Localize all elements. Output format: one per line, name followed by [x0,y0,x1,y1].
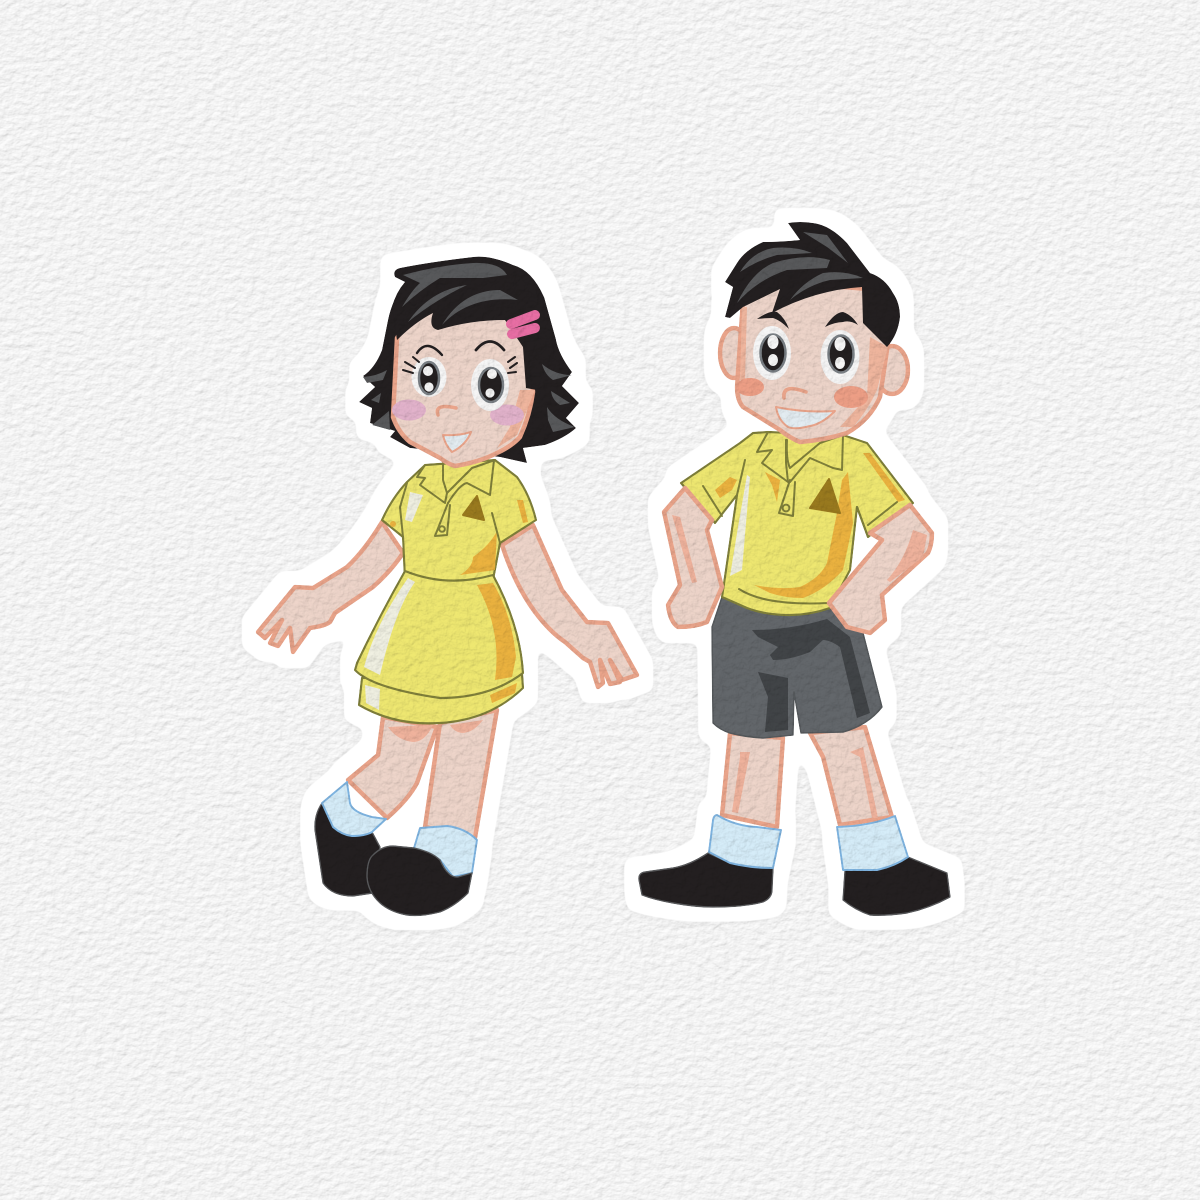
boy: arm shading [672,515,927,583]
girl: hair highlights [363,263,575,432]
boy: left leg [722,733,783,827]
girl: lower skirt [359,673,523,723]
boy: shirt [681,432,913,615]
boy: right shoe [843,857,950,915]
girl: nose [437,407,456,415]
boy: left shoe [639,853,773,907]
boy: shorts shading [752,619,870,732]
girl: back hair [359,282,579,463]
girl: left sock [322,782,386,836]
girl: hair clip [511,315,535,334]
girl: right knee shade [450,720,483,733]
boy: left sock [709,815,781,868]
girl: right sock [414,826,477,877]
boy: right arm and fist [829,505,932,633]
boy: hair highlights [737,232,863,303]
girl: right leg [425,710,497,838]
boy: face [737,280,888,442]
girl: upper skirt [355,571,523,698]
girl: shirt and skirt shading [364,492,528,710]
girl: face [393,300,533,466]
boy: nose [784,389,806,398]
boy: right leg [810,727,892,825]
girl: right arm and hand [502,525,637,687]
boy: cheeks [736,378,868,408]
girl: face shading [497,390,535,448]
boy: mouth [776,407,835,428]
boy: left arm and fist [664,488,722,627]
girl: left eye [412,357,446,397]
girl: left shoe [315,803,380,896]
girl: front hair [392,257,556,390]
girl: eyebrows and lashes [403,342,517,373]
character: girl sticker [258,257,637,916]
boy: shirt shading [715,453,905,598]
girl: left arm and hand [258,522,403,652]
girl: right eye [471,359,509,411]
girl: shirt [382,460,536,585]
girl: mouth [443,432,471,452]
girl: cheeks [392,400,524,426]
girl: right shoe [367,846,472,916]
boy: leg shading [732,747,878,818]
girl: left leg [348,717,437,818]
boy: right eye [820,330,860,384]
boy: right sock [837,816,908,870]
boy: face shading [740,307,888,427]
boy: eyebrows [757,312,858,329]
boy: right ear [876,346,908,394]
boy: shorts [712,597,882,738]
girl: shirt badge triangle [463,496,484,520]
boy: shirt badge triangle [810,479,840,513]
boy: left ear [720,328,748,378]
boy: hair [725,222,900,347]
character: boy sticker [639,222,950,915]
boy: collar, placket and seams [703,432,897,603]
boy: left eye [753,326,791,380]
girl: collar and placket [400,460,500,543]
girl: left knee shade [388,725,433,742]
